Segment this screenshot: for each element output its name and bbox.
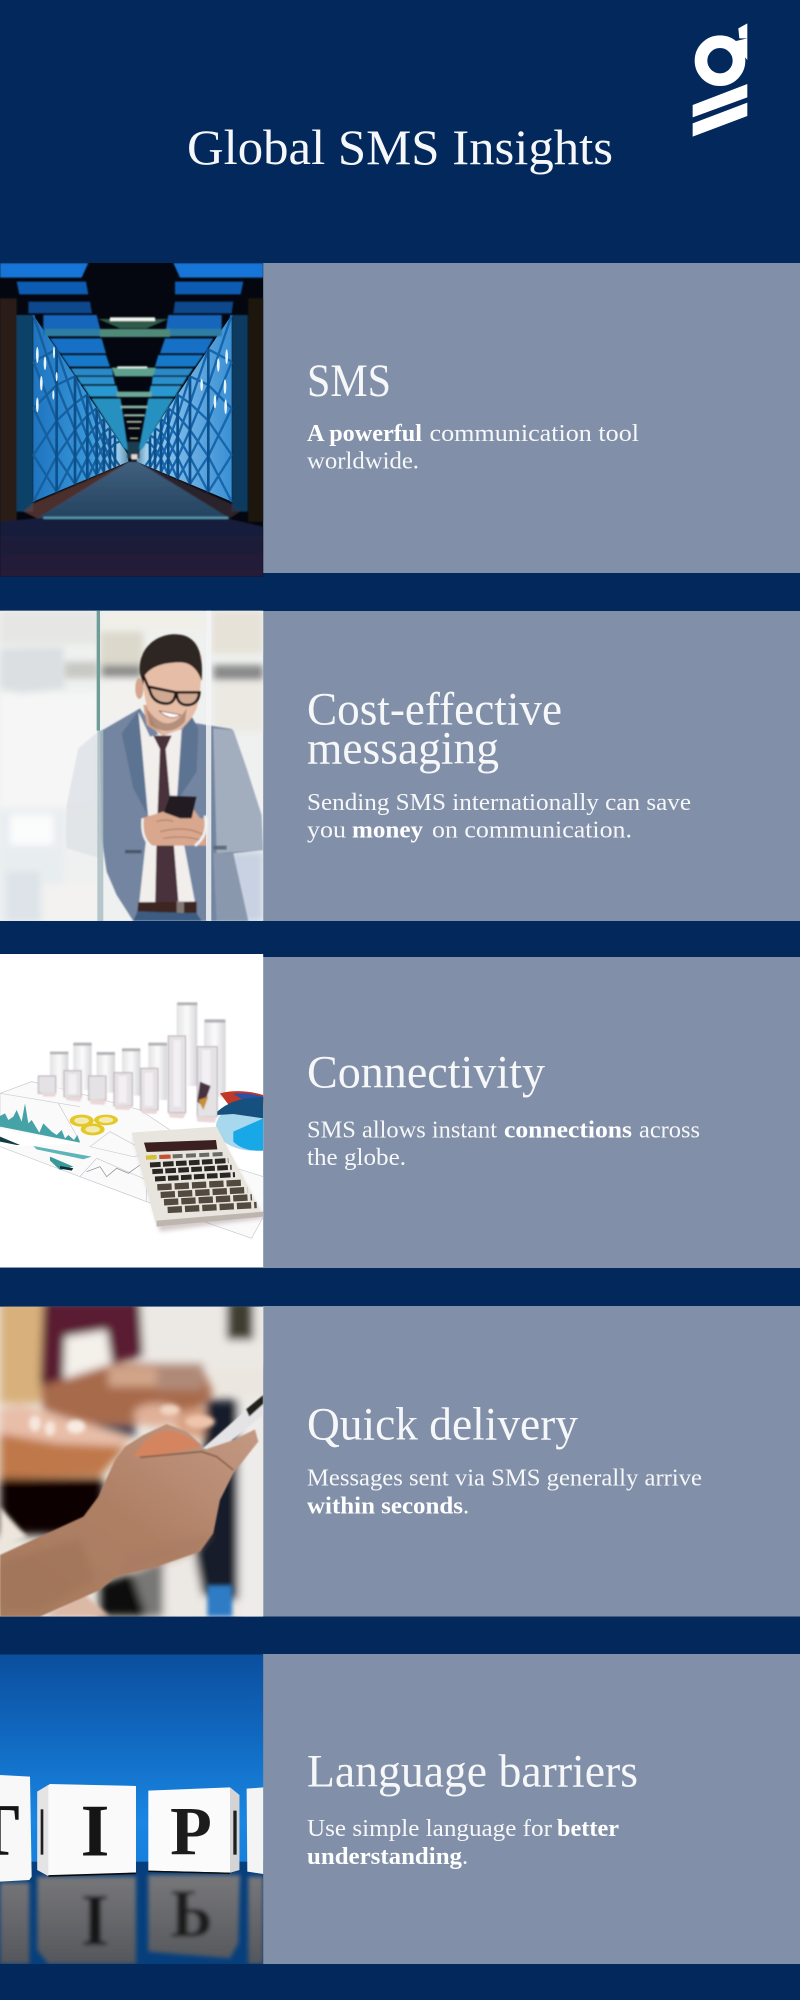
panel background <box>263 957 800 1268</box>
photo: hand holding phone <box>0 1300 267 1620</box>
jacket <box>100 708 263 921</box>
glasses <box>143 676 199 705</box>
shirt <box>138 712 195 902</box>
reflections <box>0 1875 263 1964</box>
ceiling beams <box>43 315 222 460</box>
belt and trousers <box>137 902 197 913</box>
body text: Connectivity: SMS allows instant <box>307 1116 497 1144</box>
jacket behind glass <box>66 732 98 857</box>
reflections: I <box>81 1879 109 1961</box>
cube S <box>247 1787 263 1874</box>
panel: SMS <box>0 263 800 577</box>
body text: Cost-effective messaging <box>307 789 691 844</box>
logo <box>693 23 747 137</box>
heading: Cost-effective messaging: messaging <box>307 722 499 774</box>
lattice walls <box>33 315 232 502</box>
panel: Connectivity <box>0 954 800 1268</box>
body text: Quick delivery <box>307 1464 702 1520</box>
calculator <box>132 1127 263 1232</box>
heading: Quick delivery: Quick delivery <box>307 1398 578 1450</box>
body text: Cost-effective messaging: Sending SMS internationally can save <box>307 789 691 816</box>
hair <box>140 634 202 685</box>
heading: Cost-effective messaging <box>307 684 562 774</box>
photo: TIPS letter cubes <box>0 1654 263 1964</box>
tie <box>153 736 179 920</box>
body text: SMS: A powerful <box>307 420 422 447</box>
phone <box>202 1402 264 1450</box>
body text: Connectivity: across <box>639 1116 700 1144</box>
body text: Quick delivery: Messages sent via SMS generally arrive <box>307 1464 702 1492</box>
cube P: P <box>170 1793 212 1869</box>
cuffs and hands <box>142 807 208 846</box>
neck and face <box>143 705 183 736</box>
body text: Cost-effective messaging: on communication. <box>432 816 632 844</box>
cube I: I <box>81 1791 109 1873</box>
phone <box>164 796 197 818</box>
body text: Connectivity: connections <box>504 1116 632 1144</box>
cube T <box>0 1775 32 1882</box>
sleeve buttons <box>125 850 142 853</box>
body text: Connectivity <box>307 1116 700 1171</box>
body text: Language barriers: Use simple language for <box>307 1815 552 1842</box>
body text: SMS: worldwide. <box>307 448 419 474</box>
body text: Quick delivery: . <box>463 1492 469 1520</box>
photo: smiling man with phone <box>0 611 263 922</box>
heading: Cost-effective messaging: Cost-effective <box>307 684 562 736</box>
body text: Cost-effective messaging: money <box>352 816 424 844</box>
photo: charts and calculator <box>0 954 291 1268</box>
body text: Language barriers: . <box>462 1843 468 1870</box>
reflections: P <box>170 1877 212 1953</box>
heading: Language barriers: Language barriers <box>307 1746 638 1798</box>
title: Global SMS Insights <box>187 119 613 175</box>
panel: Language barriers <box>0 1654 800 1964</box>
panel: Quick delivery <box>0 1300 800 1620</box>
glass bars <box>38 1002 226 1123</box>
coins <box>70 1115 118 1135</box>
photo: blue lit tunnel <box>0 263 263 577</box>
teal line chart <box>0 1103 80 1143</box>
pie chart <box>216 1091 264 1151</box>
heading: SMS: SMS <box>307 355 391 407</box>
body text: SMS: communication tool <box>430 420 639 447</box>
main hand <box>0 1424 258 1617</box>
body text: Cost-effective messaging: you <box>307 816 346 844</box>
cube I <box>37 1784 136 1876</box>
smile <box>159 711 181 718</box>
body text: Language barriers: better <box>557 1815 619 1842</box>
panel background <box>263 611 800 921</box>
panel background <box>263 263 800 573</box>
panel background <box>263 1654 800 1964</box>
heading: Connectivity: Connectivity <box>307 1046 545 1098</box>
body text: Connectivity: the globe. <box>307 1144 406 1171</box>
paper sheets <box>0 1082 263 1238</box>
cube P <box>148 1787 239 1873</box>
panel: Cost-effective messaging <box>0 611 800 922</box>
lapels <box>122 708 147 815</box>
body text: Quick delivery: within seconds <box>307 1492 463 1520</box>
body text: Language barriers: understanding <box>307 1843 463 1870</box>
glass edges <box>97 611 100 731</box>
panel background <box>263 1306 800 1616</box>
body text: SMS <box>307 420 639 474</box>
body text: Language barriers <box>307 1815 619 1870</box>
